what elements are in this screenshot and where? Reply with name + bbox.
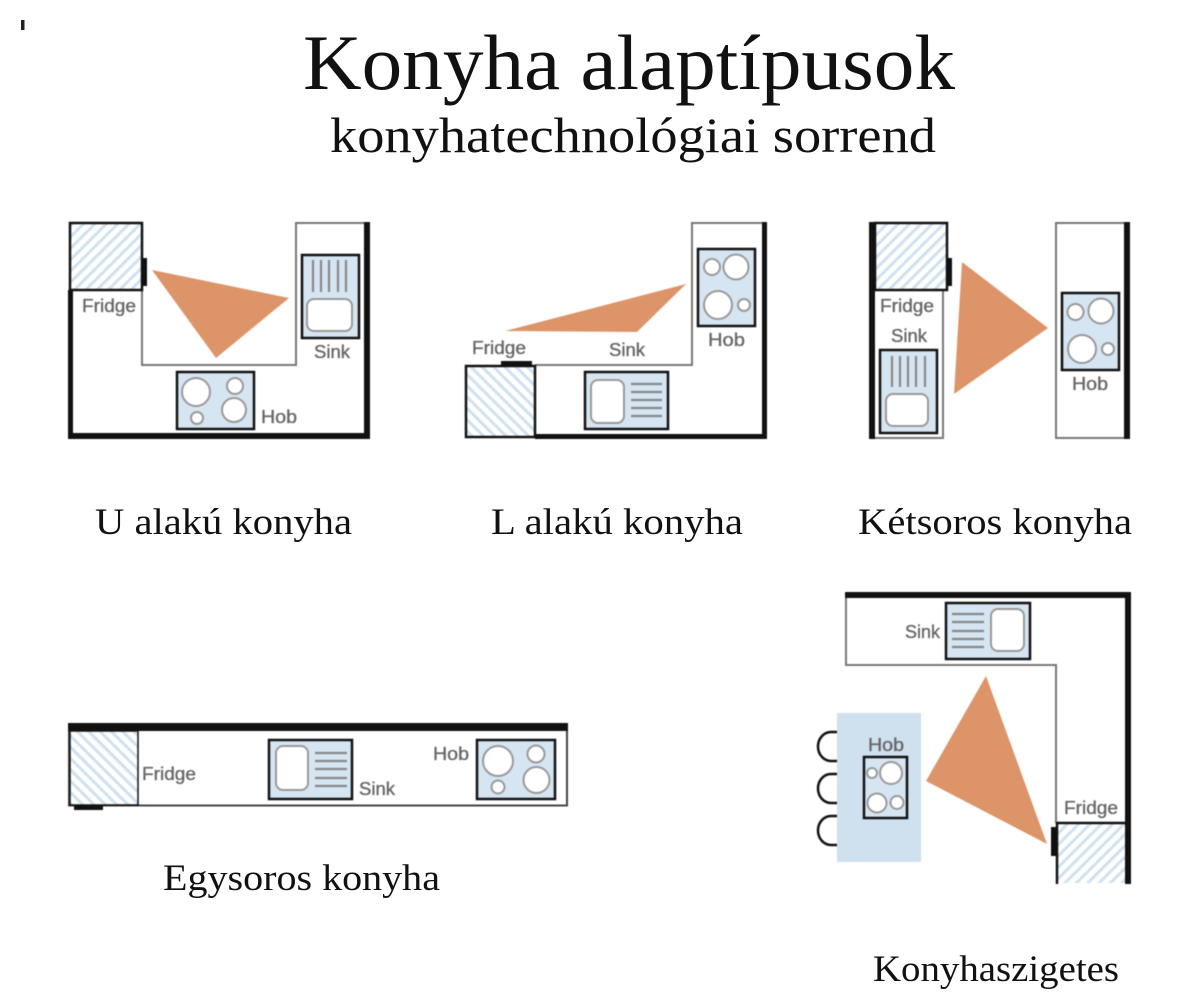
labels: [472, 330, 745, 360]
caption: two-row: Kétsoros konyha: [858, 502, 1132, 543]
labels: Fridge: [880, 296, 934, 316]
subtitle: konyhatechnológiai sorrend: [330, 107, 936, 163]
work triangle: [926, 676, 1047, 844]
labels: Sink: [905, 622, 941, 642]
labels: Hob: [868, 735, 904, 755]
labels: Hob: [261, 407, 297, 427]
hob: [864, 757, 907, 818]
fridge: [70, 731, 138, 810]
labels: Hob: [1072, 374, 1108, 394]
island: [837, 713, 921, 862]
caption: single-row: Egysoros konyha: [163, 858, 440, 899]
sink: [880, 350, 937, 433]
sink: [946, 603, 1030, 659]
panel: L-shaped kitchen: [466, 222, 767, 439]
fridge: [466, 361, 535, 437]
caption: L: L alakú konyha: [491, 502, 743, 543]
labels: Fridge: [1064, 798, 1118, 818]
panel: U-shaped kitchen: [68, 222, 370, 439]
fridge: [875, 223, 952, 290]
caption: U: U alakú konyha: [95, 502, 352, 543]
panel: two-row kitchen: [869, 222, 1130, 439]
work triangle: [505, 284, 686, 332]
labels: Fridge: [82, 296, 136, 316]
labels: Hob: [708, 330, 745, 350]
hob: [477, 740, 555, 799]
panel: island kitchen: [818, 592, 1131, 884]
labels: Sink: [359, 779, 396, 799]
labels: Fridge: [142, 764, 196, 784]
hob: [177, 372, 254, 429]
stray tick mark: [21, 20, 24, 30]
labels: [82, 296, 351, 427]
labels: Hob: [433, 744, 469, 764]
labels: [142, 744, 469, 799]
work triangle: [954, 262, 1048, 394]
sink: [269, 740, 352, 799]
fridge: [1051, 823, 1125, 884]
panel: single-row kitchen: [68, 723, 568, 810]
hob: [698, 249, 755, 326]
work triangle: [152, 270, 289, 358]
labels: [880, 296, 1108, 394]
title: Konyha alaptípusok: [303, 19, 955, 106]
labels: Fridge: [472, 338, 526, 358]
sink: [585, 372, 668, 429]
stools: [818, 732, 837, 845]
caption: island: Konyhaszigetes: [873, 949, 1119, 990]
sink: [302, 255, 359, 338]
labels: Sink: [891, 326, 928, 346]
labels: [868, 622, 1118, 818]
labels: Sink: [609, 340, 646, 360]
fridge: [70, 223, 147, 290]
labels: Sink: [314, 342, 351, 362]
right counter: [1056, 222, 1130, 439]
hob: [1062, 293, 1119, 370]
